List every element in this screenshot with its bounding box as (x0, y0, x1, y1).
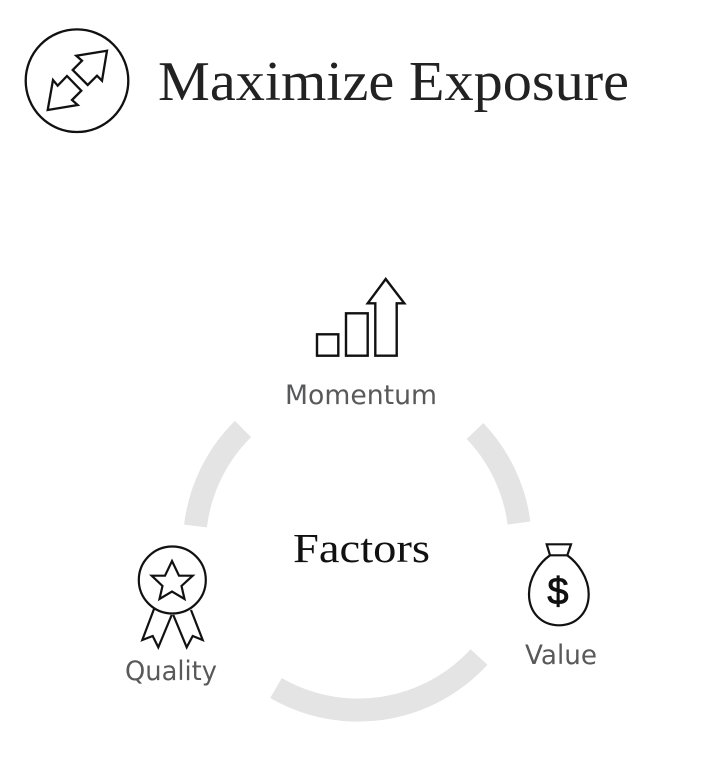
icon: value money bag: $ (547, 571, 569, 613)
factor cycle ring (196, 429, 519, 710)
title: Maximize Exposure (158, 51, 629, 113)
header icon: expand arrows in circle (26, 29, 128, 132)
icon: quality award ribbon (139, 546, 206, 647)
icon: value money bag (529, 544, 589, 625)
label: Value: Value (525, 640, 597, 671)
center heading: Factors: Factors (293, 525, 430, 571)
icon: momentum bars and arrow (317, 279, 404, 356)
label: Momentum: Momentum (285, 380, 437, 411)
label: Quality: Quality (125, 656, 217, 687)
